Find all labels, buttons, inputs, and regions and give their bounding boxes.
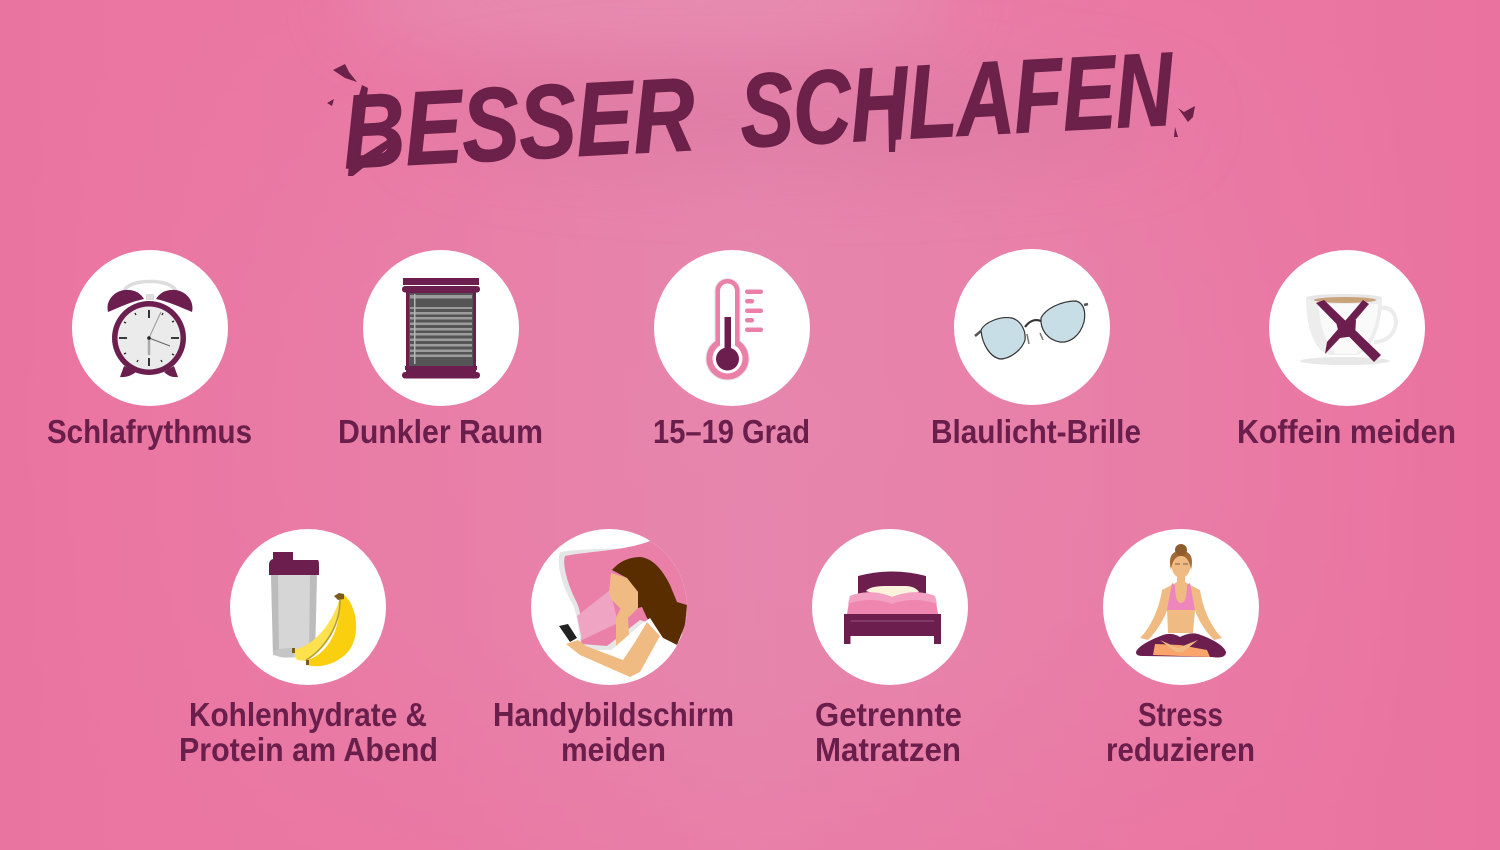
icon: alarm clock xyxy=(108,282,192,377)
panel: Getrennte Matratzen xyxy=(812,529,968,768)
label: Matratzen xyxy=(815,731,961,768)
panel: Kohlenhydrate & Protein xyxy=(179,529,438,768)
panel: 15-19 Grad xyxy=(653,250,810,450)
label xyxy=(1106,696,1255,768)
panel: Blaulicht-Brille xyxy=(931,249,1141,450)
icon: shaker and banana xyxy=(269,552,356,666)
panel: Handybildschirm meiden xyxy=(493,529,734,768)
label: Dunkler Raum xyxy=(338,413,543,450)
icon: thermometer xyxy=(706,278,763,380)
label: Schlafrythmus xyxy=(47,413,252,450)
label: reduzieren xyxy=(1106,731,1255,768)
icon: title accents xyxy=(327,64,1195,176)
label: Kohlenhydrate & xyxy=(189,696,427,733)
panel: Stress reduzieren xyxy=(1103,529,1259,768)
label: Koffein meiden xyxy=(1237,413,1456,450)
label xyxy=(179,696,438,768)
icon: woman with phone in bed xyxy=(558,541,687,684)
label: Getrennte xyxy=(815,696,962,733)
icon: crossed coffee cup xyxy=(1300,294,1396,365)
label: Blaulicht-Brille xyxy=(931,413,1141,450)
title: SCHLAFEN xyxy=(737,31,1177,170)
icon: window blinds xyxy=(402,278,480,378)
title xyxy=(327,31,1195,191)
panel: Dunkler Raum xyxy=(338,250,543,450)
panel: Schlafrythmus xyxy=(47,250,252,450)
label: Stress xyxy=(1138,696,1223,733)
label xyxy=(815,696,962,768)
label xyxy=(493,696,734,768)
label: Handybildschirm xyxy=(493,696,734,733)
label: Protein am Abend xyxy=(179,731,438,768)
icon: woman meditating xyxy=(1136,544,1226,657)
icon: bed xyxy=(844,572,941,644)
panel: Koffein meiden xyxy=(1237,250,1456,450)
label: meiden xyxy=(561,731,666,768)
icon: glasses xyxy=(975,301,1088,359)
title: BESSER xyxy=(340,57,698,191)
label: 15–19 Grad xyxy=(653,413,810,450)
